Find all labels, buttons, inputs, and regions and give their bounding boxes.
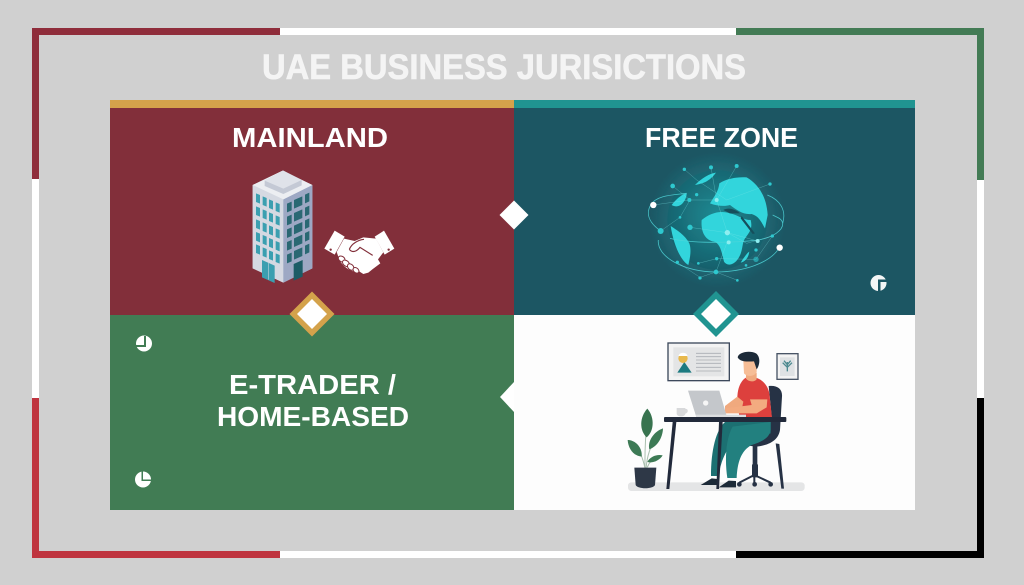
heading: e-trader home-based: E-TRADER / — [229, 369, 396, 400]
icon: pie chart bottom — [135, 470, 152, 488]
notch: white arrow into green panel — [500, 382, 514, 412]
desk — [664, 417, 786, 489]
icon: small pie chart — [870, 275, 888, 292]
floor — [628, 482, 805, 491]
coffee mug — [677, 408, 687, 416]
plant — [628, 409, 663, 488]
small framed plant — [777, 354, 798, 379]
panel: mainland — [110, 100, 514, 315]
person — [701, 352, 772, 487]
chair — [737, 386, 784, 489]
heading: mainland: MAINLAND — [232, 122, 388, 153]
illustration: person working at desk — [628, 343, 805, 491]
framed picture — [668, 343, 729, 381]
laptop — [688, 391, 746, 417]
diamond: gold connector — [290, 292, 334, 336]
icon: network globe — [648, 152, 786, 288]
heading: e-trader home-based: HOME-BASED — [217, 401, 409, 432]
icon: handshake — [324, 231, 394, 274]
heading: e-trader home-based — [217, 369, 409, 432]
diamond: teal connector — [693, 291, 739, 337]
heading: free zone: FREE ZONE — [645, 122, 798, 153]
panel: free zone — [514, 100, 915, 315]
title: UAE BUSINESS JURISICTIONS — [262, 48, 746, 87]
panel: e-trader home-based — [110, 315, 514, 510]
panel: home office — [500, 315, 915, 510]
diamond: white connector — [500, 200, 528, 230]
icon: office building — [253, 171, 312, 283]
icon: pie chart top — [136, 336, 152, 352]
